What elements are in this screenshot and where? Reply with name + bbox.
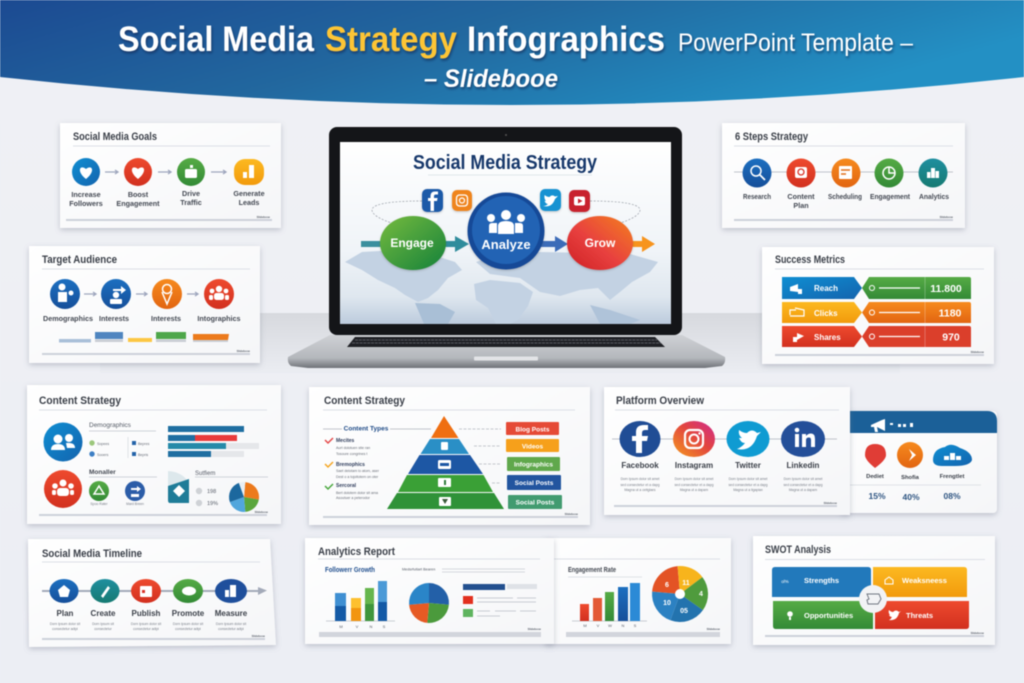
pie chart: engagement: 4 xyxy=(699,591,703,598)
platform descriptions: Magna ut a ceitglaes xyxy=(624,488,656,492)
bar chart: engagement: V xyxy=(597,623,600,628)
icon: infographics people xyxy=(204,279,234,309)
stats header bar xyxy=(840,411,997,433)
quadrant: weaknesses: Weaksneess xyxy=(902,576,947,585)
label: social posts green: Social Posts xyxy=(516,500,555,506)
labels: goals: Followers xyxy=(69,199,103,208)
bar chart: follower growth: N xyxy=(370,624,373,629)
swot center badge xyxy=(859,585,887,613)
icon: blue cloud xyxy=(933,445,972,466)
platform descriptions: Dorn Ipsum dolor sit amet xyxy=(675,477,713,481)
bar chart: follower growth: M xyxy=(339,624,343,629)
demographics block: Demographics xyxy=(89,422,132,429)
platform descriptions: Dorn Ipsum dolor sit amet xyxy=(729,477,767,481)
pie chart: followers xyxy=(409,583,449,623)
timeline labels: Measure xyxy=(215,609,248,618)
stats labels: Frengtlet xyxy=(940,474,964,480)
timeline descriptions: Dorn Ipsum dolor sit xyxy=(173,622,203,626)
panel: social media timeline: Slidebooe xyxy=(252,634,265,638)
panel: analytics report: Slidebooe xyxy=(528,627,541,631)
heading: social media timeline: Social Media Timeline xyxy=(42,548,142,560)
label: social posts blue xyxy=(507,475,561,490)
heading: 6 steps strategy: 6 Steps Strategy xyxy=(735,131,809,143)
content types list: Dest o a tojoltotem on oter xyxy=(336,475,379,479)
quadrant: opportunities: Opportunities xyxy=(804,611,853,620)
sutfiem block: 198 xyxy=(207,489,216,495)
dashed orbit lines xyxy=(372,201,640,223)
labels: steps: Scheduling xyxy=(828,192,862,201)
platform descriptions: Dorn Ipsum dolor sit amet xyxy=(621,477,659,481)
platform descriptions: sed consectetur et a dapg xyxy=(728,483,768,487)
platform descriptions: Magna ut a dapam xyxy=(789,488,817,492)
quadrant: strengths xyxy=(772,567,871,597)
demographics block: Bepris xyxy=(138,453,148,457)
timeline labels: Plan xyxy=(57,609,74,618)
timeline descriptions: consectetur adipi xyxy=(218,627,244,631)
heading: platform overview: Platform Overview xyxy=(616,395,704,407)
stats numbers: 08% xyxy=(943,491,961,501)
label: blog posts: Blog Posts xyxy=(516,426,550,434)
label: social posts blue: Social Posts xyxy=(515,480,554,487)
metric row: clicks: 1180 xyxy=(939,308,962,320)
platform labels: Facebook xyxy=(621,461,659,470)
subheading: follower growth: Followerr Growth xyxy=(325,567,375,574)
bar chart: engagement xyxy=(572,583,647,628)
title: Infographics xyxy=(467,20,665,59)
panel: platform overview: Slidebooe xyxy=(824,501,837,505)
metric row: clicks xyxy=(782,302,971,323)
label: infographics: Infographics xyxy=(514,462,553,468)
bar chart: follower growth xyxy=(326,581,395,629)
screen heading: Social Media Strategy xyxy=(413,152,598,174)
world map xyxy=(345,250,658,324)
stats numbers: 15% xyxy=(868,491,886,501)
bar chart: engagement: N xyxy=(622,623,625,628)
icon: twitter xyxy=(540,189,561,211)
panel: content strategy left: Slidebooe xyxy=(255,510,268,514)
metric row: clicks: Clicks xyxy=(814,309,838,318)
platform labels xyxy=(621,461,820,470)
arrow: engage to analyze xyxy=(445,236,469,252)
metric row: shares xyxy=(782,326,971,347)
title xyxy=(118,20,913,93)
pie chart: engagement: 05 xyxy=(680,608,688,615)
panel: platform overview xyxy=(604,387,850,515)
quadrant: threats xyxy=(875,601,969,629)
labels: goals xyxy=(69,189,265,208)
node: engage: Engage xyxy=(390,236,434,250)
icon: plan xyxy=(50,579,78,603)
icon: red pin xyxy=(865,444,886,468)
icon: facebook large xyxy=(620,421,660,457)
platform labels: Instagram xyxy=(675,461,713,470)
sutfiem block: Sutfiem xyxy=(195,471,215,477)
heading: swot analysis: SWOT Analysis xyxy=(765,544,831,556)
panel: content strategy pyramid: Slidebooe xyxy=(565,512,578,516)
content types list: Asoutuer a peterodor xyxy=(336,496,371,500)
node: grow xyxy=(567,216,633,270)
heading: engagement rate: Engagement Rate xyxy=(568,565,616,574)
node: grow: Grow xyxy=(585,236,616,250)
icon: publish xyxy=(131,579,161,603)
icon: red people xyxy=(44,470,82,508)
platform descriptions: sed consectetur et a dapg xyxy=(783,483,823,487)
small bar row xyxy=(59,332,229,342)
heading: social media goals: Social Media Goals xyxy=(73,131,157,143)
content types list: Saet delotam lo atom, aser xyxy=(336,469,380,473)
icon: linkedin large xyxy=(781,421,825,457)
icon: demographics xyxy=(50,279,80,309)
stats numbers: 40% xyxy=(902,492,920,502)
laptop base xyxy=(288,335,725,368)
icon: instagram xyxy=(452,190,472,211)
timeline descriptions: consectetur adipi xyxy=(175,627,201,631)
laptop xyxy=(288,127,725,368)
labels: goals: Increase xyxy=(71,190,101,199)
icon: interests cone xyxy=(152,279,182,309)
label: blog posts xyxy=(506,422,559,435)
timeline labels xyxy=(57,609,248,618)
icon: generate leads xyxy=(234,159,264,185)
timeline descriptions xyxy=(50,622,246,631)
panel: success metrics: Slidebooe xyxy=(971,350,984,354)
icon: scheduling xyxy=(832,158,860,188)
labels: goals: Engagement xyxy=(116,199,160,208)
content types list: Tosoure congrines t xyxy=(336,452,367,456)
icon: facebook xyxy=(422,189,443,212)
labels: goals: Traffic xyxy=(180,198,202,207)
quadrant: strengths: ol% xyxy=(781,579,789,584)
panel: social media timeline xyxy=(28,539,276,647)
labels: goals: Boost xyxy=(128,190,149,199)
content types list xyxy=(323,426,431,500)
monaller block xyxy=(89,469,157,506)
bar chart: horizontal xyxy=(168,426,259,457)
content types list: Sercoral xyxy=(336,483,357,489)
panel: content strategy left xyxy=(27,385,281,524)
content types list: Bremophics xyxy=(336,462,365,468)
labels: audience: Intographics xyxy=(197,314,241,323)
labels: audience: Demographics xyxy=(43,314,93,323)
pie chart: engagement: 10 xyxy=(663,600,671,607)
title: – Slidebooe xyxy=(424,65,558,93)
labels: steps: Research xyxy=(743,192,771,201)
label: videos: Videos xyxy=(522,444,543,450)
labels: audience: Interests xyxy=(99,314,129,323)
stats labels: Dediet xyxy=(866,474,884,480)
quadrant: threats: Threats xyxy=(906,611,933,620)
labels: audience xyxy=(43,314,241,323)
header banner xyxy=(0,0,1024,105)
label: infographics xyxy=(507,457,560,471)
icon: analytics xyxy=(918,158,948,188)
timeline descriptions: consectetur adipi xyxy=(52,627,78,631)
platform labels: Linkedin xyxy=(787,461,820,470)
desk surface xyxy=(100,313,900,373)
metric row: shares: Shares xyxy=(814,333,841,342)
timeline arrow xyxy=(42,587,267,595)
sutfiem block xyxy=(195,471,268,507)
bar chart: engagement: M xyxy=(583,623,587,628)
laptop screen xyxy=(340,142,671,324)
labels: audience: Interests xyxy=(151,314,181,323)
platform descriptions: Dorn Ipsum dolor sit amet xyxy=(784,477,822,481)
demographics block xyxy=(89,422,156,458)
labels: goals: Generate xyxy=(233,189,265,198)
node: analyze xyxy=(468,192,544,270)
bar chart: engagement: S xyxy=(634,623,637,628)
timeline descriptions: Dorn Ipsum dolor sit xyxy=(216,622,246,626)
stats labels: Shofia xyxy=(901,475,920,481)
labels: steps: Plan xyxy=(793,201,809,210)
panel: target audience xyxy=(29,246,260,363)
metric row: shares: 970 xyxy=(942,332,960,344)
content types list: Bert dolotem dolor sit ama xyxy=(336,491,378,495)
panel: success metrics xyxy=(762,247,994,364)
panel: content strategy pyramid xyxy=(309,387,590,525)
title: PowerPoint Template – xyxy=(678,29,913,57)
pie chart: engagement: 6 xyxy=(665,582,669,589)
icon: blue people xyxy=(44,422,82,462)
timeline descriptions: consectetur xyxy=(94,627,113,631)
platform labels: Twitter xyxy=(735,461,761,470)
icon: measure xyxy=(215,579,247,603)
monaller block: Monaller xyxy=(89,469,116,476)
metric row: reach xyxy=(782,277,971,299)
bar chart: follower growth: S xyxy=(383,624,386,629)
icon: content plan xyxy=(786,158,816,188)
panel: swot analysis: Slidebooe xyxy=(971,631,984,635)
icon: orange play xyxy=(897,442,923,468)
labels: goals: Drive xyxy=(182,189,200,198)
icon: interests arrow xyxy=(101,279,131,309)
panel: social media goals: Slidebooe xyxy=(257,215,270,219)
timeline descriptions: consectetur adipi xyxy=(133,627,159,631)
pie chart: engagement xyxy=(652,566,708,622)
quadrant: opportunities xyxy=(773,601,873,629)
panel: target audience: Slidebooe xyxy=(237,349,250,353)
sutfiem block: 19% xyxy=(207,501,218,507)
platform descriptions: sed consectetur et a dapg xyxy=(674,483,714,487)
platform descriptions: sed consectetur et a dapg xyxy=(620,483,660,487)
laptop bezel xyxy=(329,127,682,335)
labels: goals: Leads xyxy=(239,198,259,207)
bar chart: engagement: W xyxy=(608,623,612,628)
labels: steps xyxy=(743,192,949,210)
icon: instagram large xyxy=(673,421,715,457)
heading: target audience: Target Audience xyxy=(42,254,117,266)
pie chart: engagement: 11 xyxy=(682,580,690,587)
title: Social Media xyxy=(118,20,314,59)
arrow: lead-in xyxy=(361,241,383,247)
panel: swot analysis xyxy=(753,536,995,645)
icon: drive traffic xyxy=(177,158,205,186)
timeline labels: Publish xyxy=(132,609,161,618)
labels: steps: Analytics xyxy=(919,192,949,201)
icon: youtube xyxy=(569,190,590,212)
panel: social media goals xyxy=(60,123,281,228)
icon: create xyxy=(90,579,120,603)
metric row: reach: 11.800 xyxy=(930,283,962,295)
stats labels xyxy=(866,474,964,481)
icon: megaphone xyxy=(871,419,913,432)
heading: content strategy pyramid: Content Strategy xyxy=(324,395,406,407)
timeline labels: Promote xyxy=(172,609,205,618)
legend table xyxy=(402,568,537,617)
bar chart: follower growth: V xyxy=(356,624,359,629)
arrow: grow onward xyxy=(632,236,655,252)
teal document icon xyxy=(168,471,189,503)
labels: steps: Engagement xyxy=(870,192,911,201)
demographics block: Sopees xyxy=(97,442,109,446)
heading: content strategy left: Content Strategy xyxy=(39,395,122,407)
panel: 6 steps strategy xyxy=(722,123,965,228)
heading: analytics report: Analytics Report xyxy=(318,546,395,558)
panel: engagement rate: Slidebooe xyxy=(707,627,720,631)
stats numbers xyxy=(868,491,961,502)
label: social posts green xyxy=(508,495,562,509)
node: analyze: Analyze xyxy=(481,237,531,252)
quadrant: strengths: Strengths xyxy=(804,576,839,585)
icon: increase followers xyxy=(72,158,100,186)
metric row: reach: Reach xyxy=(814,284,838,293)
title: Strategy xyxy=(325,20,457,59)
panel: 6 steps strategy: Slidebooe xyxy=(940,215,953,219)
platform descriptions: Magna ut a dapam xyxy=(680,488,708,492)
panel: engagement rate xyxy=(545,538,731,644)
icon: research xyxy=(742,158,772,188)
timeline descriptions: Dorn Ipsum dolor sit xyxy=(50,622,80,626)
arrow: analyze to grow xyxy=(540,236,568,252)
icon: promote xyxy=(173,579,203,603)
monaller block: Mard Breen xyxy=(126,502,144,506)
timeline descriptions: Dorn Ipsum sit xyxy=(92,622,114,626)
content types list: Aurt dolotuen stie ran xyxy=(336,446,370,450)
labels: steps: Content xyxy=(787,192,815,201)
label: videos xyxy=(506,439,559,452)
content types list: Content Types xyxy=(344,426,389,432)
icon: boost engagement xyxy=(124,158,152,186)
panel: stats card behind xyxy=(840,411,997,513)
heading: success metrics: Success Metrics xyxy=(775,254,845,266)
platform descriptions xyxy=(620,477,823,492)
content types list: Mecites xyxy=(336,438,355,444)
node: engage xyxy=(380,216,446,270)
icon: twitter large xyxy=(726,421,770,457)
demographics block: Bepres xyxy=(138,442,150,446)
timeline labels: Create xyxy=(91,609,116,618)
icon: engagement xyxy=(874,158,904,188)
legend table: Medsrfutlart Bearen xyxy=(402,568,435,572)
quadrant: weaknesses xyxy=(873,567,967,597)
platform descriptions: Magna ut a ligapian xyxy=(733,488,763,492)
pie chart: small xyxy=(229,482,259,512)
demographics block: Sooers xyxy=(97,453,109,457)
panel: analytics report xyxy=(305,538,554,644)
pyramid chart xyxy=(387,416,504,509)
timeline descriptions: Dorn Ipsum dolor sit xyxy=(131,622,161,626)
monaller block: Spoo Rater xyxy=(90,502,108,506)
